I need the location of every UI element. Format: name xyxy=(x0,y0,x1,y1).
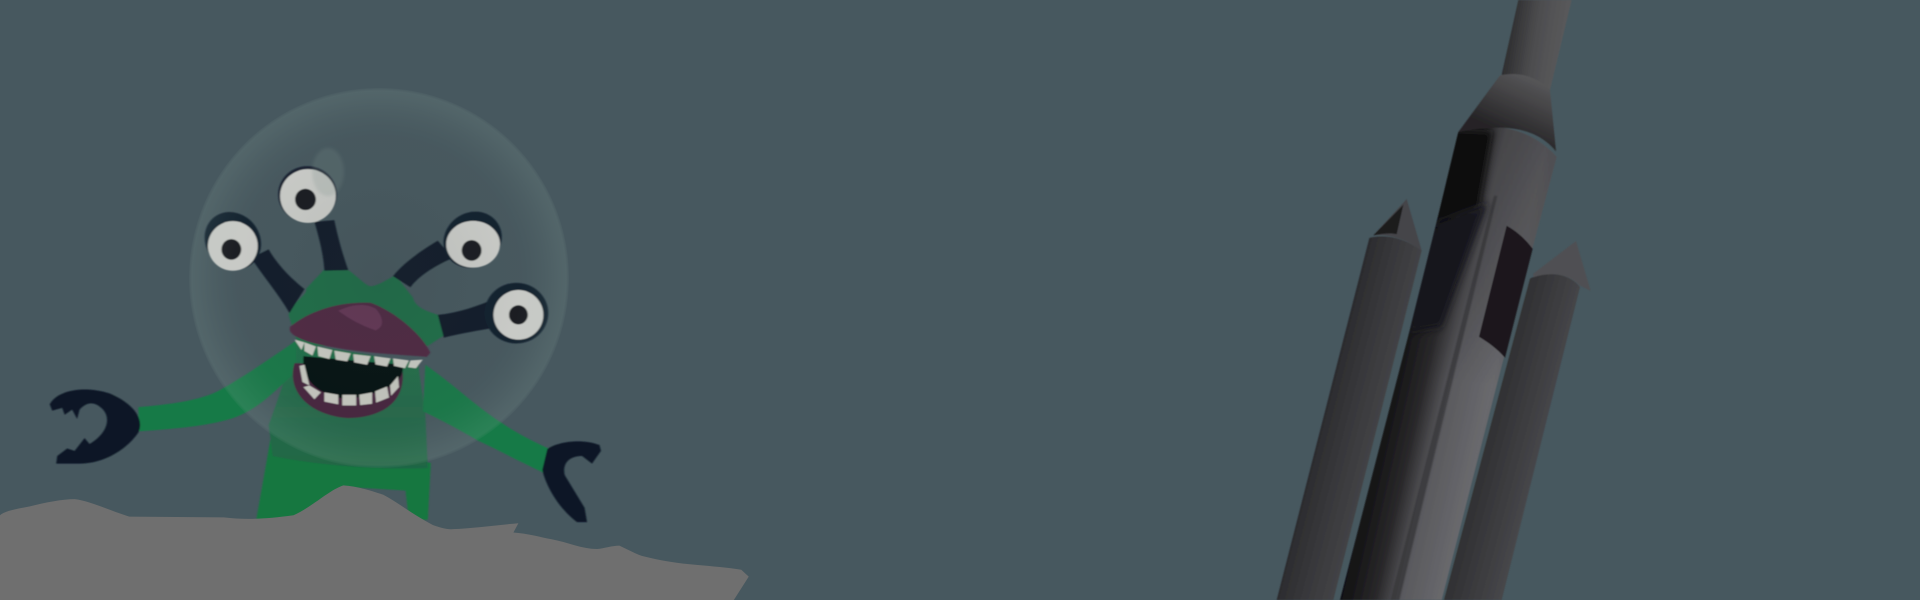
right arm xyxy=(423,365,550,473)
alien figure xyxy=(50,166,601,522)
eye: right xyxy=(438,209,507,271)
left booster cone shadow xyxy=(1373,205,1403,235)
rocket shoulder xyxy=(1458,74,1556,151)
core stripe xyxy=(1391,196,1497,600)
rocket dark window panel xyxy=(1479,226,1533,358)
glass helmet globe xyxy=(189,88,569,468)
upper lip xyxy=(290,303,430,357)
core top fade xyxy=(1408,128,1556,336)
alien torso xyxy=(269,342,428,469)
eye: far right xyxy=(485,283,548,343)
stalk: right xyxy=(393,241,453,287)
alien head xyxy=(289,270,444,346)
core upper shadow xyxy=(1433,130,1493,230)
rocket xyxy=(1277,0,1591,600)
eye stalks xyxy=(251,220,500,338)
right booster body xyxy=(1444,274,1580,600)
lower teeth xyxy=(299,365,399,405)
rocket upper stage neck xyxy=(1502,0,1572,90)
stalk: top xyxy=(314,220,348,271)
core shaded strip xyxy=(1408,203,1488,331)
left claw hand xyxy=(50,390,140,464)
stalk: far right xyxy=(438,298,500,338)
right claw hand xyxy=(542,441,601,522)
core shading xyxy=(1391,128,1556,600)
mouth interior xyxy=(303,356,403,399)
helmet reflection highlight xyxy=(312,148,344,196)
eye: top xyxy=(278,166,337,223)
stalk: left xyxy=(251,249,304,313)
eye: left xyxy=(199,209,266,272)
snowy ground xyxy=(0,485,749,600)
lip highlight xyxy=(338,305,382,330)
left booster body xyxy=(1277,236,1422,600)
alien legs xyxy=(256,435,431,520)
upper teeth xyxy=(295,340,423,368)
right booster nose cone xyxy=(1533,241,1591,291)
lower lip xyxy=(293,363,403,418)
left arm xyxy=(138,341,296,431)
left booster nose cone xyxy=(1373,199,1422,251)
rocket core body xyxy=(1340,127,1557,600)
